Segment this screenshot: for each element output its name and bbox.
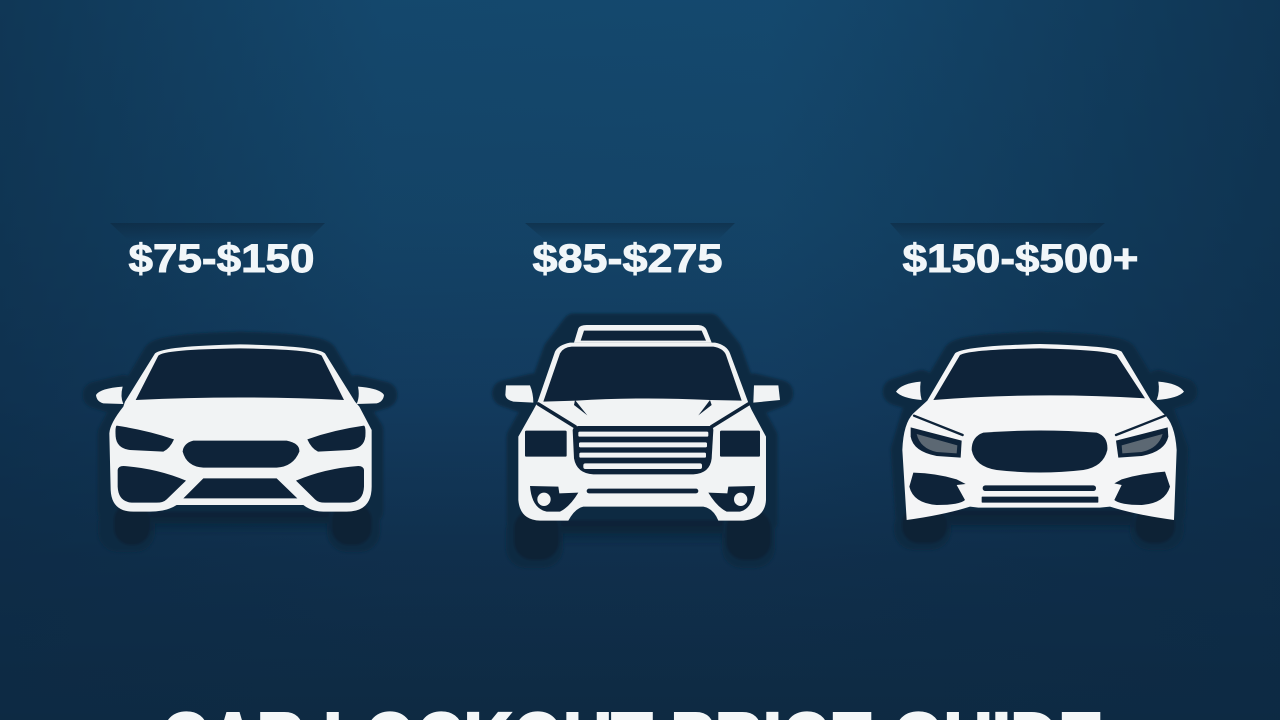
icon: SUV (505, 325, 780, 568)
icon: sedan car (96, 343, 384, 552)
price banner: luxury (890, 223, 1105, 240)
price: sedan: $75-$150 (128, 237, 314, 281)
price: SUV: $85-$275 (532, 237, 722, 281)
price banner: sedan (110, 223, 325, 240)
panel: SUV price tier (505, 223, 780, 568)
price: luxury: $150-$500+ (902, 237, 1138, 281)
icon: luxury car (894, 343, 1184, 550)
panel: sedan price tier (96, 223, 384, 552)
price banner: SUV (525, 223, 735, 240)
panel: luxury price tier (890, 223, 1184, 550)
